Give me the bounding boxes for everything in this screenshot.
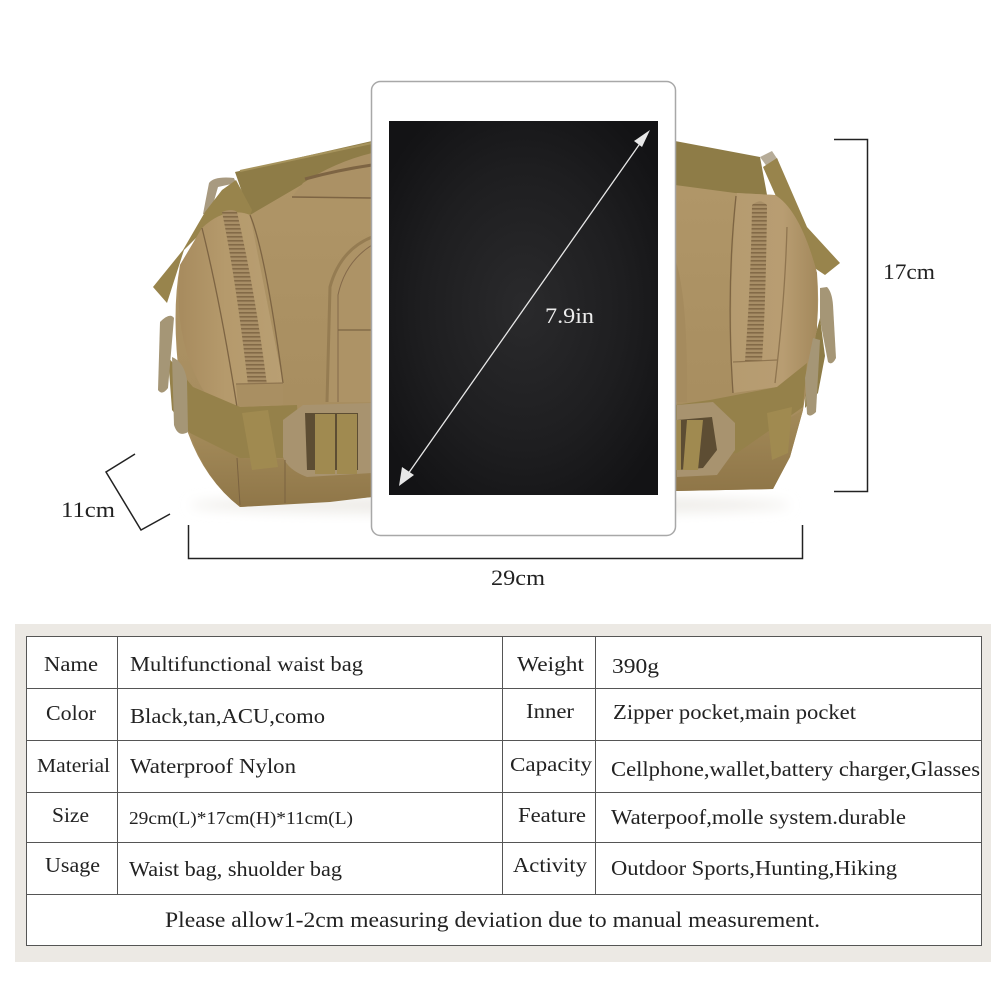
row: color / inner: Zipper pocket,main pocket [613, 700, 856, 724]
row: material / capacity: Waterproof Nylon [130, 754, 297, 778]
row: material / capacity: Material [37, 755, 110, 777]
height dimension 17cm [834, 140, 935, 492]
row: name / weight [44, 652, 660, 678]
row: size / feature: Waterpoof,molle system.durable [611, 805, 906, 829]
top zipper flap [292, 153, 372, 198]
row: color / inner: Inner [526, 699, 574, 723]
row: usage / activity: Usage [45, 853, 100, 877]
row: name / weight: Multifunctional waist bag [130, 652, 364, 676]
depth dimension 11cm: 11cm [61, 497, 115, 522]
row: usage / activity: Activity [513, 853, 588, 877]
row: name / weight: Name [44, 652, 98, 676]
row: material / capacity [37, 754, 980, 781]
row: size / feature: Feature [518, 803, 586, 827]
right strap and buckle [675, 363, 807, 477]
row: usage / activity [45, 853, 898, 881]
width dimension 29cm: 29cm [491, 565, 545, 590]
left strap and buckle [168, 357, 372, 477]
row: color / inner: Color [46, 701, 96, 725]
row: color / inner [46, 699, 856, 728]
diagonal label: 7.9in [545, 303, 594, 328]
measurement note: Please allow1-2cm measuring deviation due to manual measurement. [165, 907, 820, 932]
product photo: tactical waist bag [153, 141, 840, 514]
depth dimension 11cm [61, 454, 170, 530]
tablet screen [389, 121, 658, 495]
row: material / capacity: Cellphone,wallet,battery charger,Glasses [611, 757, 980, 781]
row: size / feature [52, 803, 906, 829]
waist belt behind the bag [235, 141, 372, 215]
row: usage / activity: Waist bag, shuolder bag [129, 857, 343, 881]
right belt buckle and tab [760, 151, 840, 408]
width dimension 29cm [188, 525, 802, 590]
right end panel [731, 193, 817, 393]
left end panel [178, 212, 283, 407]
lower panel seams [237, 458, 240, 505]
left front pocket [327, 237, 372, 402]
tablet [372, 82, 676, 536]
right side ring [805, 338, 820, 416]
row: material / capacity: Capacity [510, 754, 592, 776]
row: name / weight: Weight [517, 652, 584, 676]
row: color / inner: Black,tan,ACU,como [130, 704, 325, 728]
lower bag panel [190, 433, 372, 507]
specification table panel [15, 624, 991, 962]
left side rings [158, 316, 188, 434]
row: usage / activity: Outdoor Sports,Hunting,Hiking [611, 856, 898, 880]
bag body [176, 153, 372, 507]
row: name / weight: 390g [612, 654, 660, 678]
row: size / feature: Size [52, 803, 89, 827]
diagonal arrow [399, 130, 650, 486]
row: size / feature: 29cm(L)*17cm(H)*11cm(L) [129, 808, 353, 829]
height dimension 17cm: 17cm [883, 259, 935, 284]
left belt buckle and tab [153, 178, 252, 303]
